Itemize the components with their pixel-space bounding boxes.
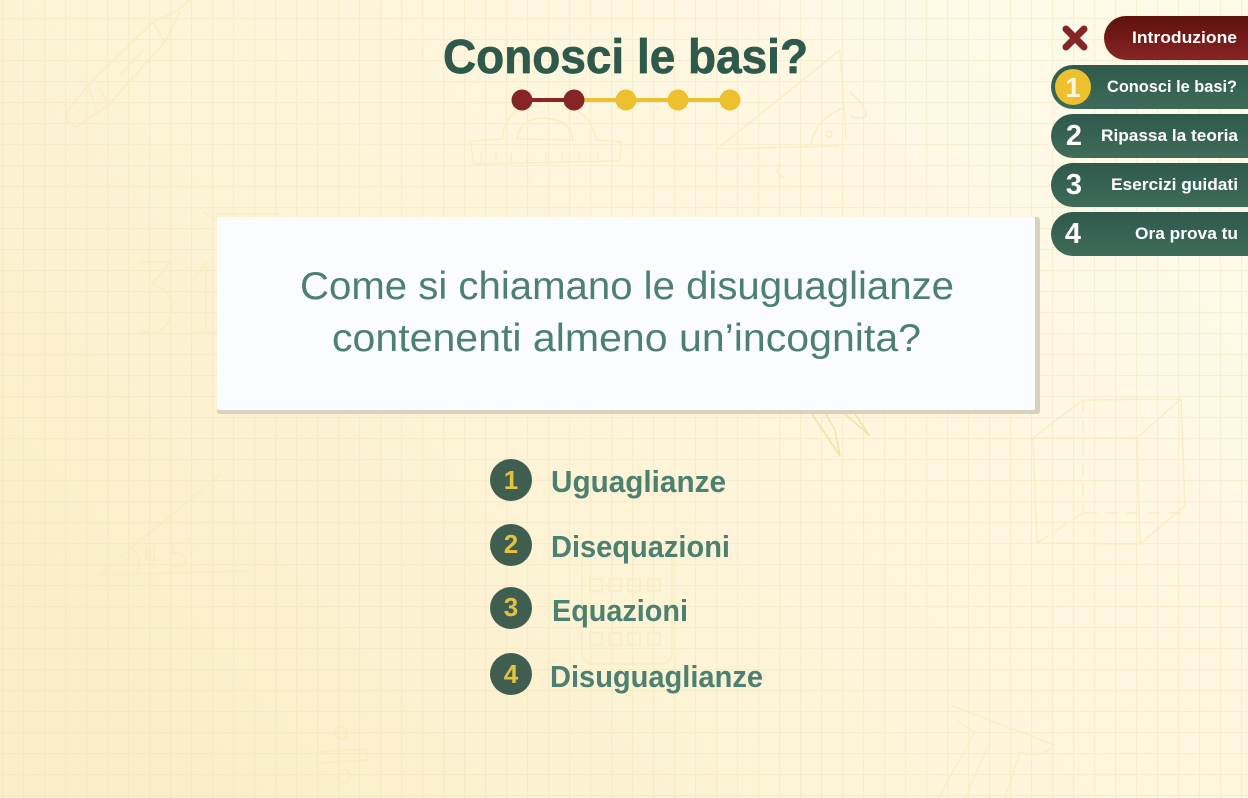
icon: close [1066, 29, 1084, 47]
nav: Introduzione [1104, 16, 1248, 60]
nav: Conosci le basi?: 1 [1065, 72, 1081, 103]
nav: Introduzione: Introduzione [1132, 28, 1237, 47]
question text [300, 265, 954, 360]
answer 3: 3 [504, 592, 518, 622]
nav: Conosci le basi?: Conosci le basi? [1107, 77, 1237, 96]
title: Conosci le basi? [443, 31, 808, 84]
answer 4: 4 [504, 659, 519, 689]
nav: Ora prova tu: 4 [1065, 218, 1081, 250]
doodle: numbers [140, 212, 280, 333]
answer 4: Disuguaglianze [550, 659, 763, 694]
progress indicator [512, 90, 740, 110]
answer 1: 1 [504, 465, 518, 495]
nav: Esercizi guidati: 3 [1066, 169, 1082, 201]
answer 4 [490, 653, 763, 695]
doodle: division sign [317, 727, 367, 782]
nav: Ripassa la teoria: 2 [1066, 120, 1082, 152]
answer 2: Disequazioni [551, 529, 730, 564]
question text: contenenti almeno un’incognita? [332, 317, 921, 360]
nav: Esercizi guidati: Esercizi guidati [1111, 175, 1238, 194]
answer 3: Equazioni [552, 593, 688, 628]
doodle: pen [812, 414, 869, 456]
answer 2 [490, 524, 730, 566]
nav: Ripassa la teoria [1051, 114, 1248, 158]
answer options [490, 459, 763, 695]
answer 3 [490, 587, 688, 629]
doodle: 45 degree angle [99, 474, 245, 575]
doodle: calculator [582, 548, 672, 664]
doodle: ruler and protractor [470, 100, 621, 164]
nav: Ripassa la teoria: Ripassa la teoria [1101, 126, 1239, 145]
nav: Conosci le basi? [1051, 65, 1248, 109]
question text: Come si chiamano le disuguaglianze [300, 265, 954, 308]
nav: Ora prova tu: Ora prova tu [1135, 224, 1238, 243]
doodle: set square [717, 50, 866, 177]
answer 1: Uguaglianze [551, 464, 726, 499]
nav: Esercizi guidati [1051, 163, 1248, 207]
question card [217, 217, 1040, 414]
doodle: pencil [66, 0, 190, 127]
doodle: cube [1033, 399, 1185, 544]
nav: Ora prova tu [1051, 212, 1248, 256]
doodle: T-square [938, 706, 1054, 798]
answer 2: 2 [504, 529, 518, 559]
answer 1 [490, 459, 726, 501]
navigation menu [1051, 16, 1248, 256]
